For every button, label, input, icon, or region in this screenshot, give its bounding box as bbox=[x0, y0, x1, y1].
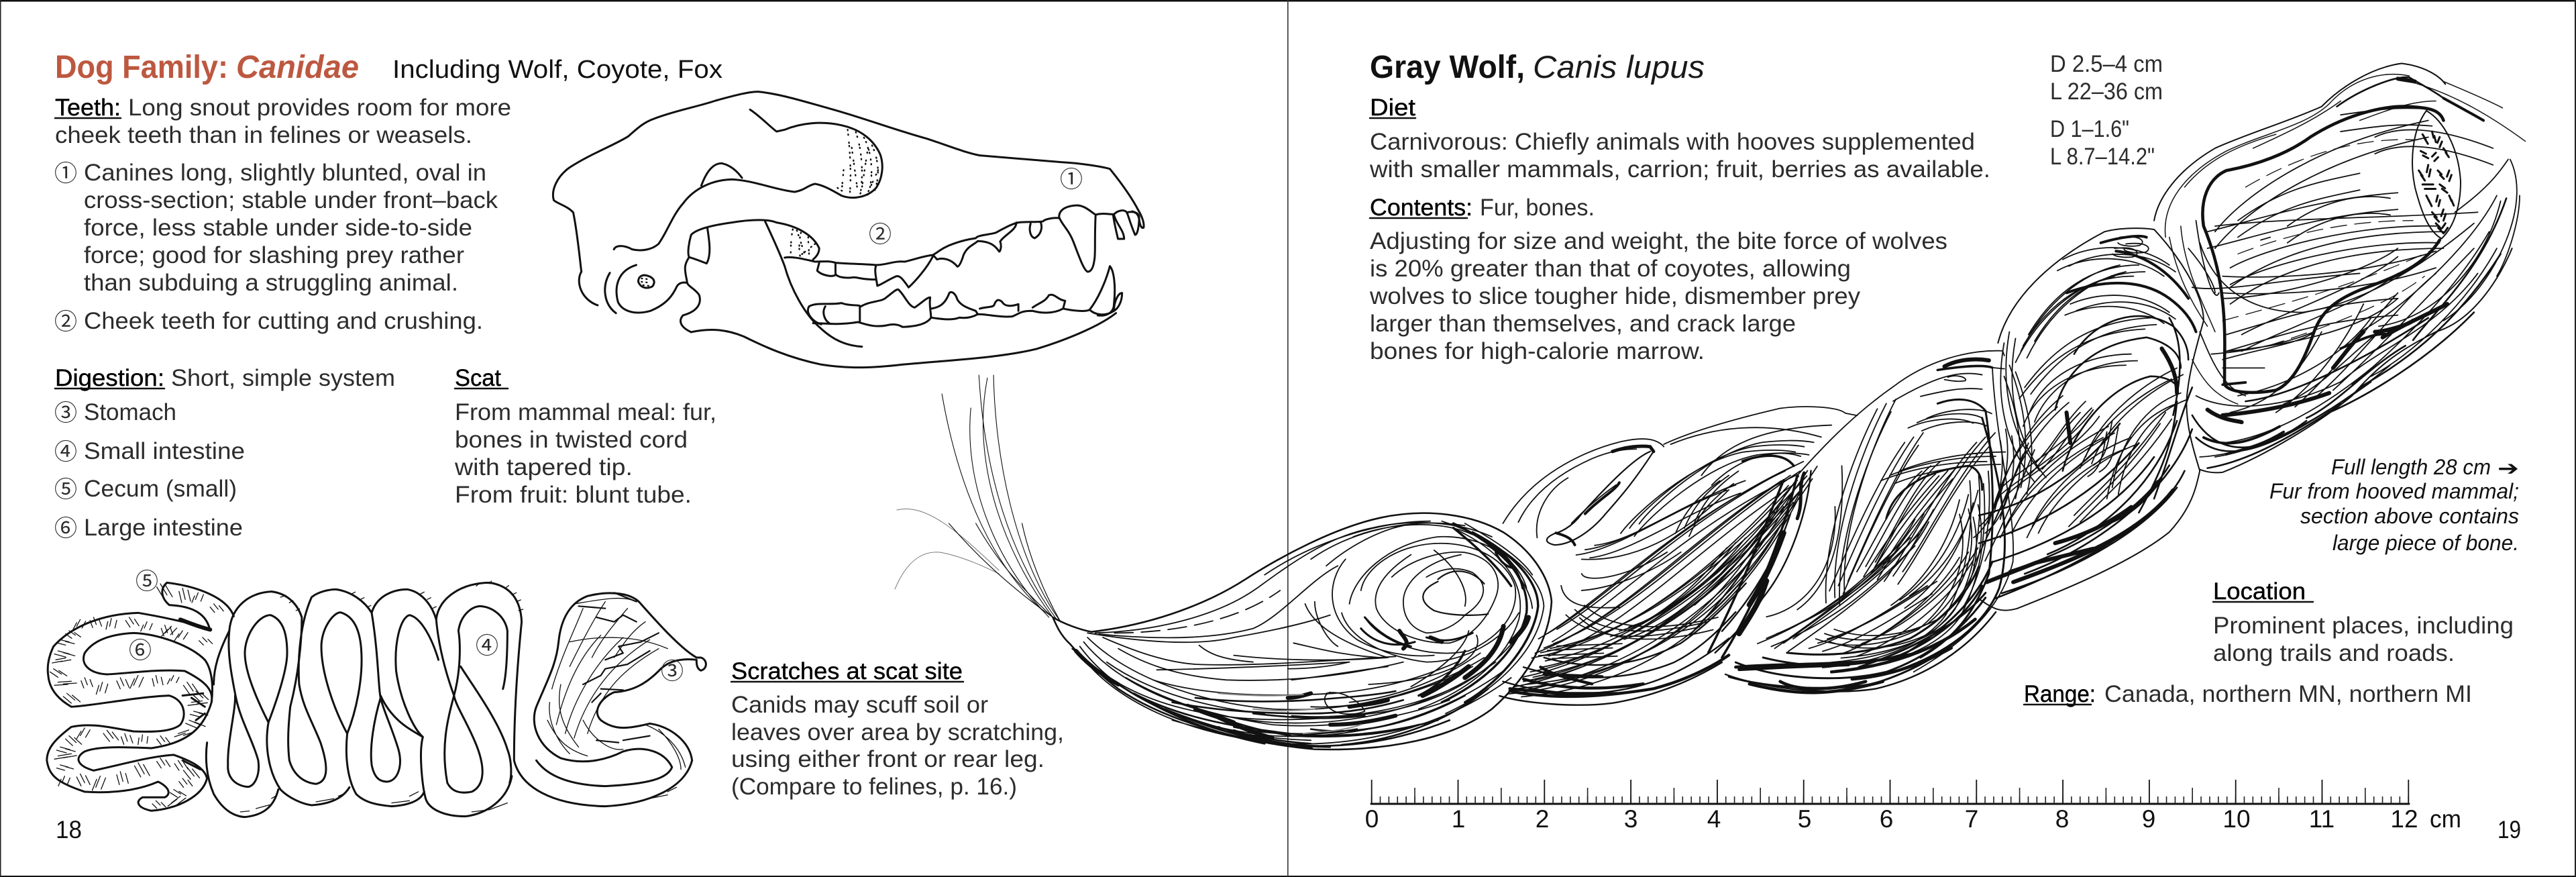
text block: scat: with tapered tip. bbox=[454, 454, 633, 480]
ruler: 11 bbox=[2309, 805, 2334, 833]
label 1: ① bbox=[1060, 161, 1083, 194]
page number 18: 18 bbox=[56, 816, 82, 843]
text block: measurements: D 1–1.6" bbox=[2050, 116, 2129, 142]
illustration: canid skull bbox=[553, 92, 1144, 368]
text block: digestion: Stomach bbox=[84, 399, 176, 425]
ruler: 8 bbox=[2055, 805, 2069, 833]
text block: scratches: (Compare to felines, p. 16.) bbox=[731, 774, 1017, 800]
text block: contents bbox=[1369, 195, 1947, 364]
text block: teeth: ① bbox=[54, 155, 77, 188]
ruler: 7 bbox=[1965, 805, 1978, 833]
text block: contents: Adjusting for size and weight, the bite force of wolves bbox=[1370, 228, 1947, 254]
note: full length bbox=[2269, 455, 2519, 555]
note: full length: section above contains bbox=[2300, 504, 2519, 528]
text block: contents: bones for high-calorie marrow. bbox=[1370, 338, 1705, 364]
text block: digestion: Digestion: bbox=[55, 365, 164, 391]
text block: teeth: ② bbox=[54, 303, 77, 336]
ruler: 3 bbox=[1624, 805, 1638, 833]
middle lobes bbox=[1499, 351, 2013, 705]
heading: Gray Wolf bbox=[1370, 49, 1705, 85]
text block: contents: Fur, bones. bbox=[1480, 195, 1595, 221]
text block: scat: bones in twisted cord bbox=[455, 427, 688, 453]
ruler: 2 bbox=[1536, 805, 1549, 833]
text block: contents: is 20% greater than that of coyotes, allowing bbox=[1370, 256, 1851, 282]
page number 19: 19 bbox=[2498, 816, 2521, 843]
note: full length: ➔ bbox=[2498, 457, 2519, 480]
text block: contents: wolves to slice tougher hide, dismember prey bbox=[1369, 283, 1861, 309]
note: full length: Full length 28 cm bbox=[2331, 455, 2491, 479]
text block: scratches: leaves over area by scratching, bbox=[731, 719, 1064, 745]
text block: scat bbox=[454, 365, 716, 508]
text block: location bbox=[2213, 578, 2514, 666]
text block: scat: Scat bbox=[455, 365, 501, 391]
text block: teeth: force; good for slashing prey rather bbox=[84, 242, 464, 268]
text block: scat: From fruit: blunt tube. bbox=[455, 482, 692, 508]
illustration: digestive tract bbox=[47, 563, 706, 817]
text block: teeth: Canines long, slightly blunted, oval in bbox=[84, 160, 486, 186]
text block: teeth: Teeth: bbox=[55, 95, 121, 121]
text block: digestion: Short, simple system bbox=[171, 365, 395, 391]
text block: digestion: Cecum (small) bbox=[84, 476, 237, 502]
text block: digestion: ⑥ bbox=[54, 510, 77, 543]
heading: Gray Wolf: Canis lupus bbox=[1533, 49, 1705, 85]
ruler: 4 bbox=[1707, 805, 1721, 833]
text block: digestion: Small intestine bbox=[84, 438, 245, 464]
ruler: 12 bbox=[2390, 805, 2418, 833]
ruler: cm bbox=[2430, 805, 2461, 833]
label 2: ② bbox=[869, 216, 892, 249]
note: full length: large piece of bone. bbox=[2332, 531, 2519, 555]
ruler: 6 bbox=[1880, 805, 1893, 833]
ruler: 10 bbox=[2222, 805, 2251, 833]
text block: diet: Diet bbox=[1370, 95, 1415, 121]
text block: teeth: cross-section; stable under front–back bbox=[84, 187, 498, 213]
panel: left page bbox=[47, 50, 1144, 843]
label 5: ⑤ bbox=[136, 563, 158, 596]
text block: scratches: Scratches at scat site bbox=[731, 658, 963, 684]
heading: Dog Family bbox=[55, 50, 722, 85]
text block: contents: larger than themselves, and crack large bbox=[1370, 311, 1796, 337]
fourth lobe and head lobe bbox=[1974, 64, 2526, 611]
text block: measurements: D 2.5–4 cm bbox=[2050, 51, 2163, 77]
label 6: ⑥ bbox=[129, 632, 152, 665]
ruler: 5 bbox=[1798, 805, 1811, 833]
text block: scratches bbox=[731, 658, 1064, 800]
label 3: ③ bbox=[661, 653, 684, 686]
text block: digestion: Large intestine bbox=[84, 515, 243, 541]
label 4: ④ bbox=[476, 627, 498, 660]
text block: location: along trails and roads. bbox=[2213, 640, 2455, 666]
text block: measurements: L 22–36 cm bbox=[2050, 79, 2163, 105]
text block: teeth: force, less stable under side-to-side bbox=[84, 215, 472, 241]
text block: scratches: using either front or rear leg. bbox=[731, 746, 1044, 772]
ruler: 9 bbox=[2142, 805, 2155, 833]
text block: diet: Carnivorous: Chiefly animals with hooves supplemented bbox=[1370, 129, 1975, 155]
text block: contents: Contents: bbox=[1370, 195, 1472, 221]
text block: scratches: Canids may scuff soil or bbox=[731, 692, 988, 718]
heading: Dog Family: Canidae bbox=[236, 50, 359, 85]
text block: diet bbox=[1369, 95, 1990, 183]
text block: diet: with smaller mammals, carrion; fruit, berries as available. bbox=[1369, 156, 1990, 183]
text block: range: Range: bbox=[2024, 681, 2096, 707]
ruler: 0 bbox=[1365, 805, 1379, 833]
heading: Gray Wolf: Gray Wolf, bbox=[1370, 50, 1525, 85]
small intestine bbox=[206, 581, 692, 817]
text block: measurements bbox=[2050, 51, 2163, 170]
text block: teeth: Long snout provides room for more bbox=[128, 95, 511, 121]
text block: scat: From mammal meal: fur, bbox=[455, 399, 716, 425]
text block: teeth: than subduing a struggling animal. bbox=[84, 270, 458, 296]
stomach bbox=[534, 592, 706, 786]
text block: digestion bbox=[54, 365, 395, 543]
ruler bbox=[1365, 792, 2461, 833]
text block: measurements: L 8.7–14.2" bbox=[2050, 144, 2155, 170]
large intestine bbox=[47, 582, 233, 811]
panel: right page bbox=[1365, 49, 2521, 843]
text block: teeth bbox=[54, 95, 511, 336]
text block: location: Location bbox=[2213, 578, 2306, 605]
heading: Dog Family: Including Wolf, Coyote, Fox bbox=[392, 56, 722, 84]
tail hairs and first lobe bbox=[895, 375, 1552, 750]
text block: location: Prominent places, including bbox=[2213, 613, 2514, 639]
text block: digestion: ③ bbox=[54, 395, 77, 427]
text block: digestion: ④ bbox=[54, 433, 77, 466]
heading: Dog Family: Dog Family: bbox=[55, 50, 228, 85]
text block: teeth: cheek teeth than in felines or weasels. bbox=[55, 122, 472, 148]
text block: range: Canada, northern MN, northern MI bbox=[2104, 681, 2472, 707]
note: full length: Fur from hooved mammal; bbox=[2269, 479, 2519, 503]
ruler: 1 bbox=[1452, 805, 1465, 833]
text block: digestion: ⑤ bbox=[54, 471, 77, 504]
text block: teeth: Cheek teeth for cutting and crushing. bbox=[84, 308, 483, 334]
illustration: wolf scat drawing bbox=[895, 64, 2526, 750]
